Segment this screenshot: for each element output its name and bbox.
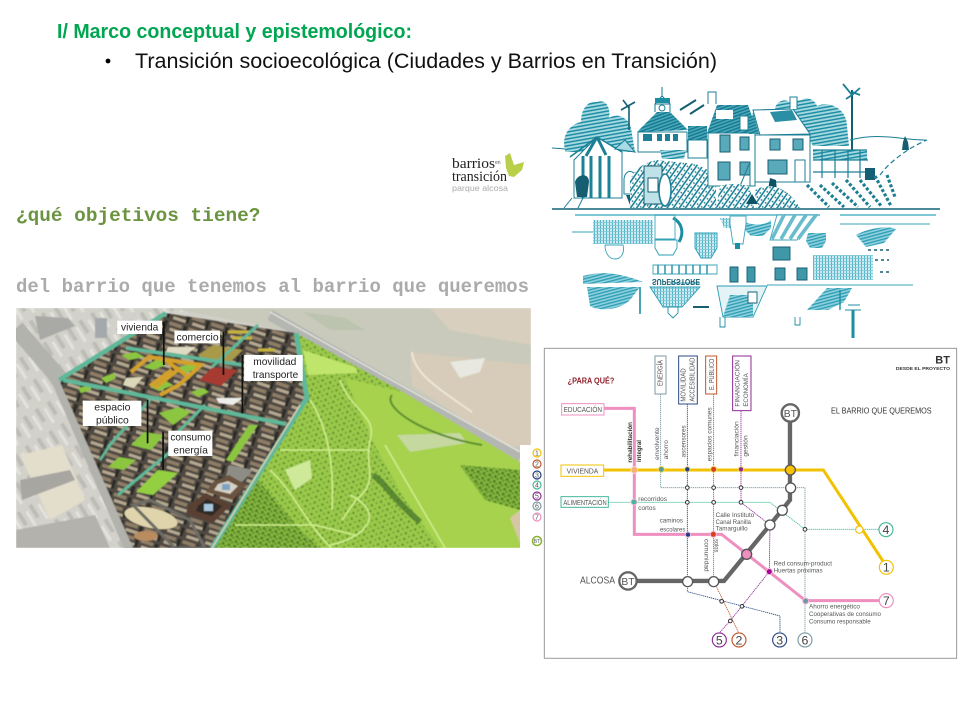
- rotated line labels: espacios comunes: [707, 407, 713, 461]
- logo: barrios en transición: en: [495, 160, 501, 166]
- rotated line labels: rehabilitación: [628, 422, 634, 463]
- heading: BT desde el proyecto: DESDE EL PROYECTO: [896, 366, 950, 372]
- legend: numbered line markers: 4: [535, 482, 539, 490]
- terminal 1: [879, 560, 893, 575]
- terminal 6: 6: [802, 633, 809, 647]
- reflected shop sign: SUPERSTORE: [652, 277, 701, 286]
- heading: del barrio que tenemos al barrio que queremos: del barrio que tenemos al barrio que queremos: [16, 276, 529, 298]
- station labels: Cooperativas de consumo: [809, 611, 882, 618]
- large stations on BT line: [683, 465, 796, 587]
- terminal 7: 7: [883, 594, 890, 608]
- box: vivienda: VIVIENDA: [567, 468, 599, 475]
- heading: BT desde el proyecto: [896, 355, 950, 372]
- legend: numbered line markers: [532, 449, 542, 546]
- label: movilidad transporte: [242, 355, 303, 413]
- station labels: Consumo responsable: [809, 619, 871, 626]
- box: financiación economía: [733, 356, 751, 411]
- logo: barrios en transición: transición: [452, 169, 507, 185]
- label: vivienda: vivienda: [121, 322, 159, 333]
- teal streets: [59, 313, 307, 548]
- aerial photo panel: [16, 308, 531, 550]
- terminal: ALCOSA BT: ALCOSA: [580, 576, 615, 587]
- rotated line labels: integral: [637, 440, 643, 462]
- terminal 4: [879, 523, 893, 537]
- rotated line labels: solos: [713, 539, 719, 552]
- station labels: recorridos: [638, 496, 667, 503]
- transit-style diagram panel: [544, 348, 957, 658]
- diagram frame: [544, 348, 957, 658]
- label: consumo energía: energía: [173, 445, 208, 456]
- label: consumo energía: consumo: [170, 432, 212, 443]
- box: vivienda: [561, 465, 604, 476]
- terminal: ALCOSA BT: [580, 572, 637, 590]
- terminal: BT top: [782, 404, 799, 422]
- station labels: Red consum-product: [774, 561, 832, 568]
- box: financiación economía: FINANCIACIÓN: [734, 360, 741, 407]
- terminal 1: 1: [883, 561, 890, 575]
- terminal: ALCOSA BT: BT: [621, 577, 635, 588]
- station labels: Canal Ranilla: [716, 519, 752, 526]
- box: energía: ENERGÍA: [656, 360, 665, 386]
- thin dotted connector lines: [608, 394, 880, 633]
- box: alimentación: [561, 497, 608, 507]
- sketch pale reflection: [572, 215, 936, 338]
- rotated line labels: ascensores: [682, 425, 688, 457]
- rotated line labels: [628, 407, 749, 572]
- legend: numbered line markers: 7: [535, 514, 539, 522]
- terminal 2: [732, 633, 746, 647]
- legend: numbered line markers: 5: [535, 494, 539, 500]
- label: movilidad transporte: transporte: [253, 370, 299, 381]
- terminal 7: [879, 594, 893, 608]
- rotated line labels: envolvente: [655, 427, 661, 460]
- label: movilidad transporte: movilidad: [253, 357, 296, 368]
- station labels: [638, 496, 882, 626]
- box: educación: [562, 404, 604, 415]
- rotated line labels: comunidad: [702, 539, 708, 572]
- terminal 3: [773, 633, 787, 647]
- logo: barrios en transición: barrios: [452, 156, 495, 172]
- photo background: surrounding city and fields: [16, 308, 531, 548]
- rotated line labels: gestión: [743, 435, 749, 457]
- box: movilidad accesibilidad: ACCESIBILIDAD: [689, 358, 696, 402]
- terminal 2: 2: [736, 633, 743, 647]
- sketch: transition town with reflection: [552, 84, 940, 338]
- label: espacio público: [83, 400, 148, 443]
- label: consumo energía: [163, 431, 212, 470]
- heading: BT desde el proyecto: BT: [935, 355, 950, 367]
- bullet subtitle: Transición socioecológica (Ciudades y Barrios en Transición): [135, 50, 717, 73]
- terminal: BT top: BT: [784, 409, 798, 420]
- box: educación: EDUCACIÓN: [564, 405, 602, 414]
- label: comercio: [174, 331, 223, 375]
- terminal 4: 4: [883, 523, 890, 537]
- terminal 5: [712, 633, 726, 647]
- station labels: Calle Instituto: [716, 512, 755, 519]
- park: [212, 333, 531, 550]
- legend: numbered line markers: 6: [535, 504, 539, 510]
- station labels: Ahorro energético: [809, 604, 861, 611]
- legend: numbered line markers: 1: [535, 450, 539, 458]
- neighbourhood blocks: [59, 313, 307, 548]
- box: espacio público: E. PÚBLICO: [707, 358, 716, 390]
- rotated line labels: financiación: [734, 421, 740, 457]
- highlighted housing, commerce and pale plots: [123, 332, 275, 405]
- label: espacio público: espacio: [94, 402, 131, 413]
- coloured stations: [631, 466, 809, 604]
- legend: numbered line markers: 3: [535, 472, 539, 480]
- sketch upper scene: [552, 84, 940, 209]
- station labels: caminos: [660, 518, 683, 525]
- label: comercio: comercio: [177, 332, 219, 343]
- small interchange nodes: [685, 486, 807, 623]
- box: movilidad accesibilidad: [679, 356, 697, 404]
- line: vivienda yellow: [603, 470, 887, 567]
- box: espacio público: [706, 356, 717, 394]
- green courtyards: [78, 352, 258, 495]
- station labels: escolares: [660, 527, 685, 534]
- numbered terminals: [712, 523, 893, 647]
- heading: el barrio que queremos: EL BARRIO QUE QUEREMOS: [831, 407, 932, 416]
- legend: numbered line markers: BT: [534, 539, 540, 545]
- rotated line labels: ahorro: [664, 439, 670, 459]
- category boxes: [561, 356, 751, 507]
- label: espacio público: público: [96, 415, 129, 426]
- icon: butterfly: [505, 153, 524, 177]
- yellow line transfer: [856, 526, 863, 533]
- box: movilidad accesibilidad: MOVILIDAD: [680, 368, 687, 402]
- station labels: Tamarguillo: [716, 526, 748, 533]
- line: BT grey: [628, 413, 790, 581]
- station labels: cortos: [638, 505, 656, 512]
- box: alimentación: ALIMENTACIÓN: [563, 498, 607, 507]
- title: I/ Marco conceptual y epistemológico:: [57, 21, 412, 43]
- label: vivienda: [117, 321, 164, 365]
- terminal 5: 5: [716, 633, 723, 647]
- heading: para qué: ¿PARA QUÉ?: [568, 377, 614, 386]
- logo: barrios en transición: [452, 153, 524, 193]
- line: educación pink: [603, 408, 880, 601]
- white legend strip: [520, 445, 546, 550]
- courtyard blocks with pools: [186, 475, 246, 523]
- logo: barrios en transición: parque alcosa: [452, 183, 508, 193]
- legend: numbered line markers: 2: [535, 462, 539, 468]
- terminal 3: 3: [776, 633, 783, 647]
- heading: objetivos: ¿qué objetivos tiene?: [16, 205, 260, 227]
- station labels: Huertas próximas: [774, 567, 823, 574]
- box: energía: [655, 356, 666, 394]
- box: financiación economía: ECONOMÍA: [743, 373, 750, 407]
- terminal 6: [798, 633, 812, 647]
